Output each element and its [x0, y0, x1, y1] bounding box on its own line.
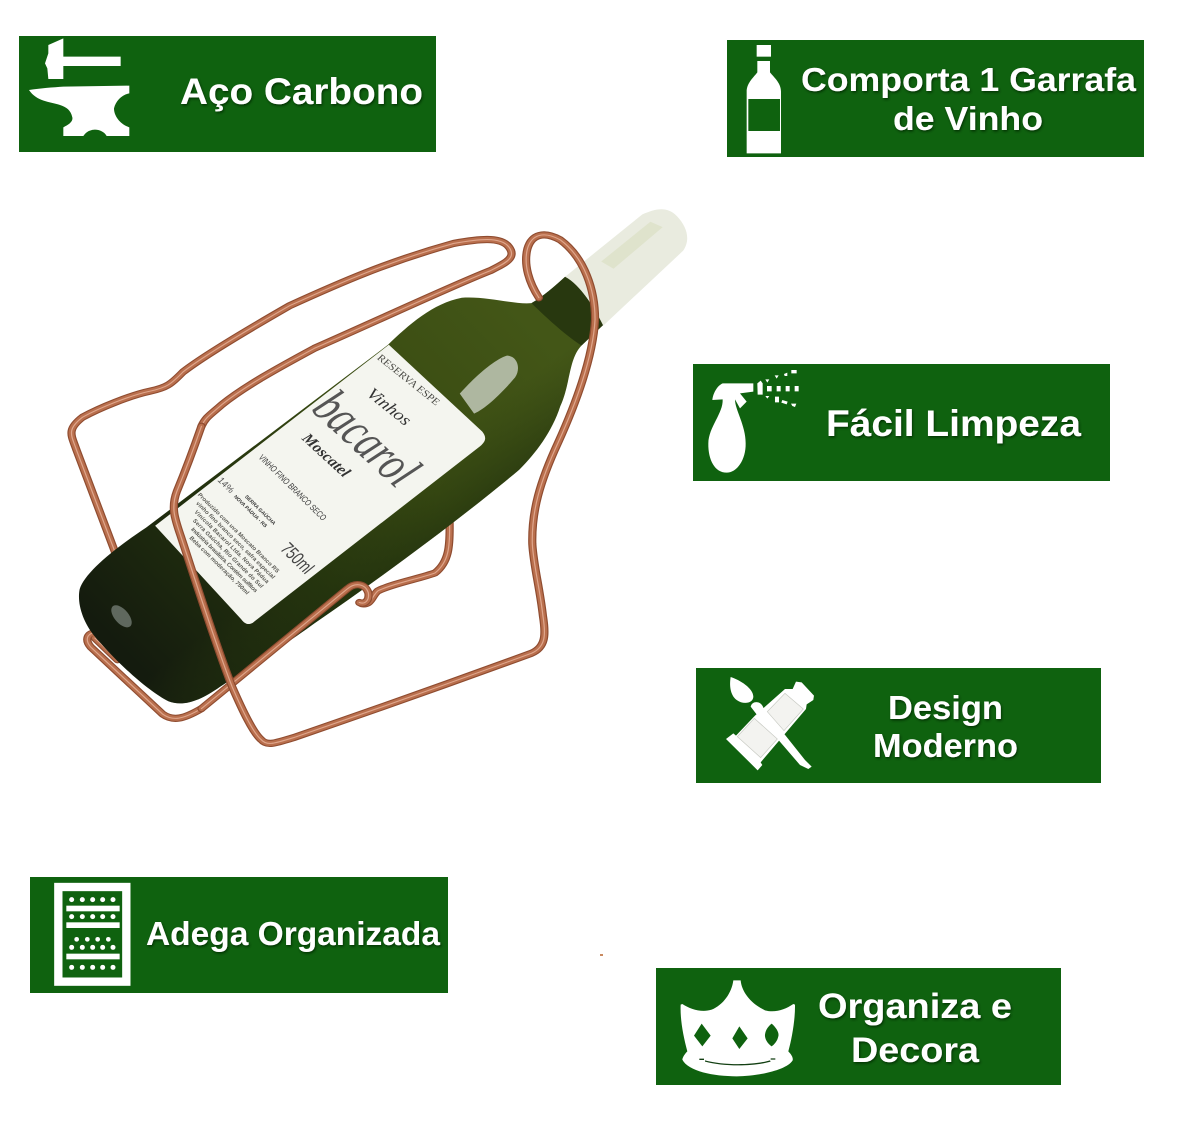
- label: Adega Organizada: Adega Organizada: [146, 915, 441, 952]
- label text: vinho fino branco seco, safra especial: [194, 501, 276, 581]
- label text: Indústria brasileira. Contém sulfitos: [189, 527, 258, 594]
- label: Design Moderno: Moderno: [873, 727, 1018, 764]
- bottle neck: [532, 277, 603, 346]
- bottle body: [79, 277, 603, 703]
- panel: Design Moderno: [696, 668, 1101, 783]
- rack: front wires: [174, 235, 595, 743]
- icon: hammer and anvil: [29, 38, 129, 136]
- label text: Moscatel: [297, 430, 354, 481]
- label: Organiza e Decora: Decora: [851, 1031, 980, 1070]
- bottle foil capsule: [565, 209, 687, 326]
- label text: Beba com moderação, 750ml: [187, 536, 250, 596]
- bottle base highlight: [107, 602, 136, 630]
- label text: RESERVA ESPE: [374, 353, 442, 408]
- label: Comporta 1 Garrafa de Vinho: [801, 61, 1137, 137]
- stray specks: [600, 954, 603, 956]
- icon: spray bottle: [708, 370, 799, 473]
- label text: bacarol: [301, 380, 432, 497]
- label: Comporta 1 Garrafa de Vinho: Comporta 1 Garrafa: [801, 61, 1137, 98]
- label text: NOVA PÁDUA - RS: [232, 494, 269, 529]
- bottle glass highlight: [460, 356, 518, 414]
- wine label: [155, 345, 485, 624]
- label text: SERRA GAÚCHA: [243, 494, 278, 527]
- panel: Aço Carbono: [19, 36, 436, 152]
- label: Design Moderno: Design: [888, 689, 1003, 726]
- label text: Serra Gaúcha, Rio Grande do Sul: [191, 518, 264, 590]
- panel: Organiza e Decora: [656, 968, 1061, 1085]
- label text: Vinhos: [363, 384, 416, 429]
- label text: [167, 353, 442, 599]
- label text: 750ml: [276, 539, 319, 577]
- label text: Produzido com uva Moscato Branco RS: [196, 493, 280, 574]
- panel: Comporta 1 Garrafa de Vinho: [727, 40, 1144, 157]
- label: Design Moderno: [873, 689, 1018, 764]
- icon: crown: [681, 980, 795, 1076]
- panel: Fácil Limpeza: [693, 364, 1110, 481]
- label text: VINHO FINO BRANCO SECO: [256, 453, 329, 522]
- icon: wine bottle: [747, 45, 781, 153]
- label: Fácil Limpeza: Fácil Limpeza: [826, 403, 1081, 444]
- wine bottle: [79, 209, 687, 703]
- product photo: wine bottle in copper rack: [71, 209, 687, 743]
- label: Organiza e Decora: Organiza e: [818, 987, 1012, 1026]
- icon: paint tube and brush: [726, 677, 814, 770]
- label text: 14%: [215, 476, 236, 495]
- label: Aço Carbono: Aço Carbono: [180, 71, 423, 112]
- label text: Vinícola Bacarol Ltda. Nova Pádua: [192, 510, 270, 585]
- icon: wine cellar: [58, 887, 126, 982]
- rack: rear wires: [71, 240, 512, 718]
- panel: Adega Organizada: [30, 877, 448, 993]
- label: Comporta 1 Garrafa de Vinho: de Vinho: [893, 100, 1043, 137]
- label: Organiza e Decora: [818, 987, 1012, 1070]
